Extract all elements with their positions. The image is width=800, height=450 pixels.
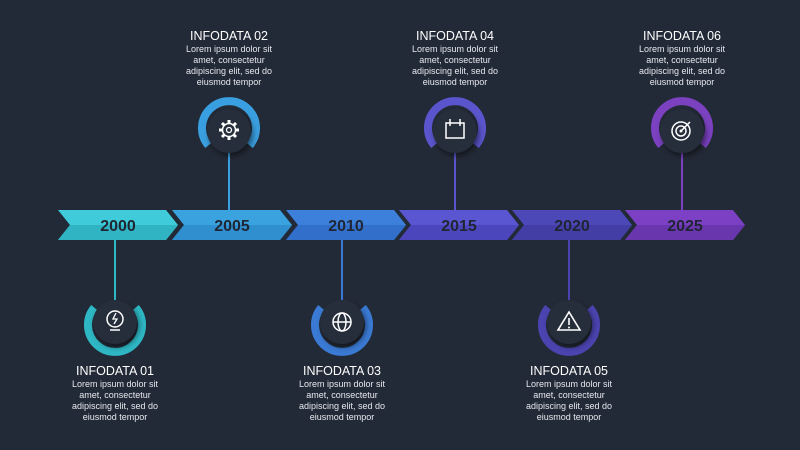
text 03: INFODATA 03 (303, 364, 381, 378)
icon 06 target (655, 101, 709, 153)
connectors (115, 150, 682, 300)
text 02: amet, consectetur (193, 55, 265, 65)
icon 03 globe (315, 300, 369, 352)
text 01: INFODATA 01 (76, 364, 154, 378)
text 05: INFODATA 05 (530, 364, 608, 378)
text 04: amet, consectetur (419, 55, 491, 65)
icon 02 gear (202, 101, 256, 153)
text 04: INFODATA 04 (416, 29, 494, 43)
text 03: amet, consectetur (306, 390, 378, 400)
arrow 2005: 2005 (214, 218, 250, 235)
text 01: eiusmod tempor (83, 412, 147, 422)
text 05: eiusmod tempor (537, 412, 601, 422)
text 02: INFODATA 02 (190, 29, 268, 43)
arrow 2010 (286, 210, 406, 240)
arrow 2000: 2000 (100, 218, 136, 235)
text 04 (412, 29, 499, 87)
text 01: Lorem ipsum dolor sit (72, 379, 159, 389)
text 04: eiusmod tempor (423, 77, 487, 87)
text 02: Lorem ipsum dolor sit (186, 44, 273, 54)
arrow 2015: 2015 (441, 218, 477, 235)
text 02: adipiscing elit, sed do (186, 66, 272, 76)
text 06: adipiscing elit, sed do (639, 66, 725, 76)
text 06 (639, 29, 726, 87)
text 01: amet, consectetur (79, 390, 151, 400)
text 05: Lorem ipsum dolor sit (526, 379, 613, 389)
text 01: adipiscing elit, sed do (72, 401, 158, 411)
arrow 2025 (625, 210, 745, 240)
text 03 (299, 364, 386, 422)
arrow 2005 (172, 210, 292, 240)
arrow 2020 (512, 210, 632, 240)
text 04: adipiscing elit, sed do (412, 66, 498, 76)
icon 05 warning (542, 300, 596, 352)
text 01 (72, 364, 159, 422)
text 03: Lorem ipsum dolor sit (299, 379, 386, 389)
text 05 (526, 364, 613, 422)
icon 01 lightbulb (88, 300, 142, 352)
text 02: eiusmod tempor (197, 77, 261, 87)
text 06: INFODATA 06 (643, 29, 721, 43)
text 06: Lorem ipsum dolor sit (639, 44, 726, 54)
text 02 (186, 29, 273, 87)
text 04: Lorem ipsum dolor sit (412, 44, 499, 54)
arrow 2015 (399, 210, 519, 240)
arrow 2010: 2010 (328, 218, 364, 235)
text 05: adipiscing elit, sed do (526, 401, 612, 411)
text 03: eiusmod tempor (310, 412, 374, 422)
arrow 2025: 2025 (667, 218, 703, 235)
text 03: adipiscing elit, sed do (299, 401, 385, 411)
text 06: amet, consectetur (646, 55, 718, 65)
text 06: eiusmod tempor (650, 77, 714, 87)
arrow 2020: 2020 (554, 218, 590, 235)
timeline arrows (58, 210, 745, 240)
arrow 2000 (58, 210, 178, 240)
text 05: amet, consectetur (533, 390, 605, 400)
icon 04 calendar (428, 101, 482, 153)
